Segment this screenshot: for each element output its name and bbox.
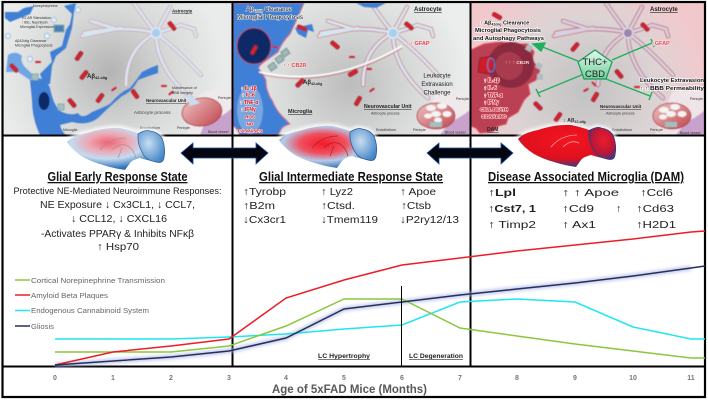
icon: pale zone around cytokine text <box>237 86 263 134</box>
label: LC degeneration: LC Degeneration <box>409 354 463 360</box>
labels: intermediate response illustration: ↑ IFNγ <box>241 107 256 113</box>
labels: intermediate response illustration: ↑ TNF-α <box>240 100 259 106</box>
text block: disease associated microglia: ↑ ↑ Apoe <box>562 187 619 199</box>
x axis labels: 2 <box>169 375 173 382</box>
chart: line chart of pathology over age <box>55 231 705 366</box>
x axis labels <box>53 375 695 382</box>
labels: intermediate response illustration: 42olig <box>253 9 263 13</box>
panel: disease associated microglia illustration <box>471 3 705 135</box>
text block: glial intermediate response state: ↑Tyrobp <box>243 186 286 198</box>
labels: intermediate response illustration: Challenge <box>423 90 451 96</box>
text block: glial intermediate response state: ↑Ctsd. <box>321 200 355 212</box>
labels: early response illustration: Aβ <box>87 74 95 80</box>
icon: brain early stage <box>67 128 165 170</box>
labels: intermediate response illustration: Microglia <box>288 109 313 115</box>
x axis labels: 3 <box>227 375 231 382</box>
labels: DAM illustration: Astrocyte <box>650 7 678 13</box>
text block: disease associated microglia: ↑Cd63 <box>636 203 674 215</box>
text block: glial early response state: Glial Early Response State <box>48 169 188 184</box>
icon: DAM inner core <box>495 52 523 80</box>
legend: Cortical Norepinephrine Transmission <box>31 276 165 285</box>
icon: THC + CBD pentagon: THC+ <box>582 57 608 68</box>
text block: glial early response state <box>14 169 222 253</box>
labels: DAM illustration: ↓ Aβ <box>563 118 574 124</box>
labels: DAM illustration: SIGNALING <box>481 114 507 119</box>
labels: early response illustration: 42-olig <box>95 76 108 80</box>
arrow: intermediate to DAM <box>427 143 513 164</box>
text block: glial early response state: NE Exposure ↓ Cx3CL1, ↓ CCL7, <box>40 199 195 211</box>
labels: DAM illustration: DAM <box>487 127 498 133</box>
labels: early response illustration: Endothelium <box>140 126 160 130</box>
labels: early response illustration: ↑IDE, Neprilysin <box>22 20 48 24</box>
labels: DAM illustration: Clearance <box>502 20 529 26</box>
labels: intermediate response illustration: Neurovascular Unit <box>364 104 412 110</box>
labels: intermediate response illustration: Leukocyte <box>423 74 451 80</box>
labels: intermediate response illustration: Blood vessel <box>445 130 466 134</box>
icon: microglia nucleus <box>237 28 271 64</box>
labels: DAM illustration: ↑ IL-1β <box>484 78 500 84</box>
labels: DAM illustration: ↑ Aβ <box>480 20 491 26</box>
labels: intermediate response illustration: ↑ IL-1β <box>241 86 257 92</box>
labels: DAM illustration: 42-olig <box>574 120 586 124</box>
labels: DAM illustration: ↑ ↑ ↑ CB2R <box>505 60 530 66</box>
icon: vesicles <box>6 7 81 62</box>
x axis labels: 11 <box>687 375 695 382</box>
icon: astrocyte <box>319 3 438 98</box>
icon: receptor blocks <box>525 44 543 80</box>
labels: intermediate response illustration <box>237 7 469 134</box>
legend: Gliosis <box>31 322 54 331</box>
text block: glial intermediate response state: ↑ Lyz2 <box>321 186 353 198</box>
panel: early response illustration <box>3 3 232 135</box>
panel: intermediate response illustration <box>233 3 470 135</box>
labels: DAM illustration <box>473 7 705 135</box>
icon: THC + CBD pentagon: CBD <box>585 69 605 80</box>
labels: early response illustration: Microglial Phagocytosis <box>15 44 53 48</box>
x axis labels: 10 <box>629 375 637 382</box>
line: gliosis <box>55 266 705 365</box>
x axis labels: 8 <box>515 375 519 382</box>
icon: amyloid plaques <box>9 21 177 108</box>
x axis labels: 0 <box>53 375 57 382</box>
icon: THC + CBD pentagon <box>578 50 612 80</box>
icon: astrocyte <box>554 3 673 98</box>
text block: glial intermediate response state: ↓P2ry12/13 <box>400 214 459 226</box>
text block: disease associated microglia: ↑Cst7, 1 <box>488 203 536 215</box>
legend: Amyloid Beta Plaques <box>31 291 108 300</box>
icon: amyloid plaques <box>492 12 650 122</box>
labels: early response illustration: Astrocyte <box>172 8 193 14</box>
text block: disease associated microglia: ↑H2D1 <box>636 219 676 231</box>
x axis labels: 6 <box>400 375 404 382</box>
text block: glial early response state: -Activates PPARγ & Inhibits NFκβ <box>41 228 194 240</box>
labels: DAM illustration: ↑ ↑ BBB Permeability <box>640 86 705 92</box>
legend: Endogenous Cannabinoid System <box>31 306 149 315</box>
labels: early response illustration: BBB Integrity <box>172 91 193 95</box>
labels: intermediate response illustration: NO <box>247 122 254 126</box>
labels: early response illustration: Maintenance of <box>172 86 197 90</box>
labels: early response illustration: Norepinephrine <box>33 4 58 8</box>
arrow: early to intermediate <box>181 143 268 164</box>
labels: DAM illustration: Neurovascular Unit <box>600 104 642 109</box>
text block: glial early response state: ↓ CCL12, ↓ CXCL16 <box>71 213 167 225</box>
legend <box>15 276 165 331</box>
labels: DAM illustration: Leukocyte Extravasion <box>640 78 705 84</box>
arrow: signal to astrocyte <box>259 46 402 76</box>
icon: green inhibition lines <box>533 39 654 100</box>
labels: early response illustration <box>15 4 231 134</box>
text block: glial intermediate response state: ↓Tmem119 <box>321 214 378 226</box>
labels: DAM illustration: Astrocyte process <box>606 112 635 116</box>
labels: intermediate response illustration: Extravasion <box>421 82 453 88</box>
line: cortical norepinephrine transmission <box>55 299 705 358</box>
labels: early response illustration: Aβ42olig Clearance <box>15 39 46 43</box>
text block: disease associated microglia: ↑ Timp2 <box>488 219 536 231</box>
labels: DAM illustration: 42olig <box>491 22 502 26</box>
labels: early response illustration: Blood vessel <box>208 130 229 134</box>
labels: DAM illustration: ↑GFAP <box>652 41 670 47</box>
labels: DAM illustration: and Autophagy Pathways <box>473 36 544 42</box>
text block: glial intermediate response state: Glial Intermediate Response State <box>259 169 443 184</box>
text block: glial intermediate response state <box>243 169 459 226</box>
line: endogenous cannabinoid system <box>55 299 705 339</box>
icon: microglial process tip <box>295 24 314 38</box>
icon: brain DAM stage <box>518 125 616 167</box>
labels: early response illustration: E2 AR Stimulation <box>22 16 51 20</box>
labels: early response illustration: Pericyte <box>218 96 231 100</box>
text block: disease associated microglia: ↑ Ax1 <box>562 219 596 231</box>
labels: DAM illustration: Microglial Phagocytosis <box>475 28 541 34</box>
icon: DAM microglia <box>471 42 540 133</box>
icon: blood vessel <box>653 90 705 135</box>
labels: DAM illustration: CELL DEATH <box>480 107 508 112</box>
labels: DAM illustration: ↑ IL-6 <box>484 86 497 92</box>
labels: intermediate response illustration: Endothelium <box>376 128 396 132</box>
x axis labels: 5 <box>342 375 346 382</box>
labels: early response illustration: Microglial Expression <box>20 25 54 29</box>
icon: top process <box>356 3 386 8</box>
labels: DAM illustration: Endothelium <box>612 128 632 132</box>
labels: intermediate response illustration: Astrocyte process <box>371 112 400 116</box>
labels: DAM illustration: ↑ IFNγ <box>484 100 499 106</box>
icon: receptor blocks <box>268 48 290 71</box>
labels: intermediate response illustration: Clearance <box>263 7 292 13</box>
text block: glial intermediate response state: ↓Cx3cr1 <box>243 214 286 226</box>
icon: DAM dark inner ring <box>488 42 534 88</box>
icon: receptor blocks <box>31 24 65 112</box>
labels: early response illustration: Pericyte <box>177 126 190 130</box>
labels: intermediate response illustration: Astrocyte <box>414 7 442 13</box>
labels: intermediate response illustration: Pericyte <box>413 128 426 132</box>
labels: intermediate response illustration: CASPASES <box>238 128 262 134</box>
arrow: red edge <box>259 48 402 78</box>
x axis labels: 4 <box>284 375 288 382</box>
line: amyloid beta plaques <box>55 231 705 365</box>
icon: DAM nucleus <box>478 56 494 74</box>
labels: early response illustration: Microglia <box>63 128 77 132</box>
text block: glial intermediate response state: ↑Ctsb <box>401 200 431 212</box>
x axis labels: 1 <box>111 375 115 382</box>
text block: glial early response state: ↑ Hsp70 <box>97 241 139 253</box>
text block: glial early response state: Protective NE-Mediated Neuroimmune Responses: <box>14 186 222 196</box>
text block: disease associated microglia: Disease Associated Microglia (DAM) <box>488 169 684 184</box>
marker: LC phase divider <box>400 286 402 366</box>
labels: early response illustration: Astrocyte process <box>134 110 171 115</box>
line glow: gliosis <box>55 268 691 365</box>
labels: intermediate response illustration: ↑ ↑ GFAP <box>406 41 430 47</box>
labels: intermediate response illustration: Aβ <box>246 7 253 13</box>
x axis labels: 9 <box>573 375 577 382</box>
labels: intermediate response illustration: 42-olig <box>311 82 322 86</box>
text block: disease associated microglia: ↑Ccl6 <box>640 187 673 199</box>
text block: disease associated microglia: ↑Cd9 <box>562 203 594 215</box>
labels: DAM illustration: ↑ TNF-α <box>484 93 503 99</box>
labels: intermediate response illustration: ROS <box>245 114 255 120</box>
labels: DAM illustration: Pericyte <box>690 97 703 101</box>
labels: intermediate response illustration: ↑ IL-6 <box>242 92 255 98</box>
icon: amyloid plaques <box>250 21 414 106</box>
labels: DAM illustration: Pericyte <box>650 128 663 132</box>
x axis labels: 7 <box>458 375 462 382</box>
labels: DAM illustration: Blood vessel <box>680 131 701 135</box>
labels: intermediate response illustration: Microglial Phagocytosis <box>237 15 303 21</box>
icon: activated microglia <box>233 3 304 135</box>
text block: disease associated microglia <box>488 169 684 231</box>
labels: intermediate response illustration: ↑ ↑ CB2R <box>283 63 307 69</box>
labels: early response illustration: Neurovascular Unit <box>146 98 187 103</box>
labels: intermediate response illustration: Aβ <box>303 80 311 86</box>
icon: brain intermediate stage <box>279 126 377 168</box>
labels: intermediate response illustration: Pericyte <box>456 97 469 101</box>
label: LC hypertrophy: LC Hypertrophy <box>318 354 371 360</box>
x axis title: Age of 5xFAD Mice (Months) <box>272 382 427 396</box>
icon: blood vessel <box>417 90 470 135</box>
icon: microglia with processes <box>5 3 158 135</box>
text block: glial intermediate response state: ↑B2m <box>243 200 275 212</box>
icon: blood vessel <box>180 89 232 135</box>
icon: astrocyte <box>82 3 201 98</box>
text block: glial intermediate response state: ↑ Apoe <box>400 186 436 198</box>
text block: disease associated microglia: ↑ <box>616 203 621 215</box>
text block: disease associated microglia: ↑Lpl <box>488 187 516 199</box>
